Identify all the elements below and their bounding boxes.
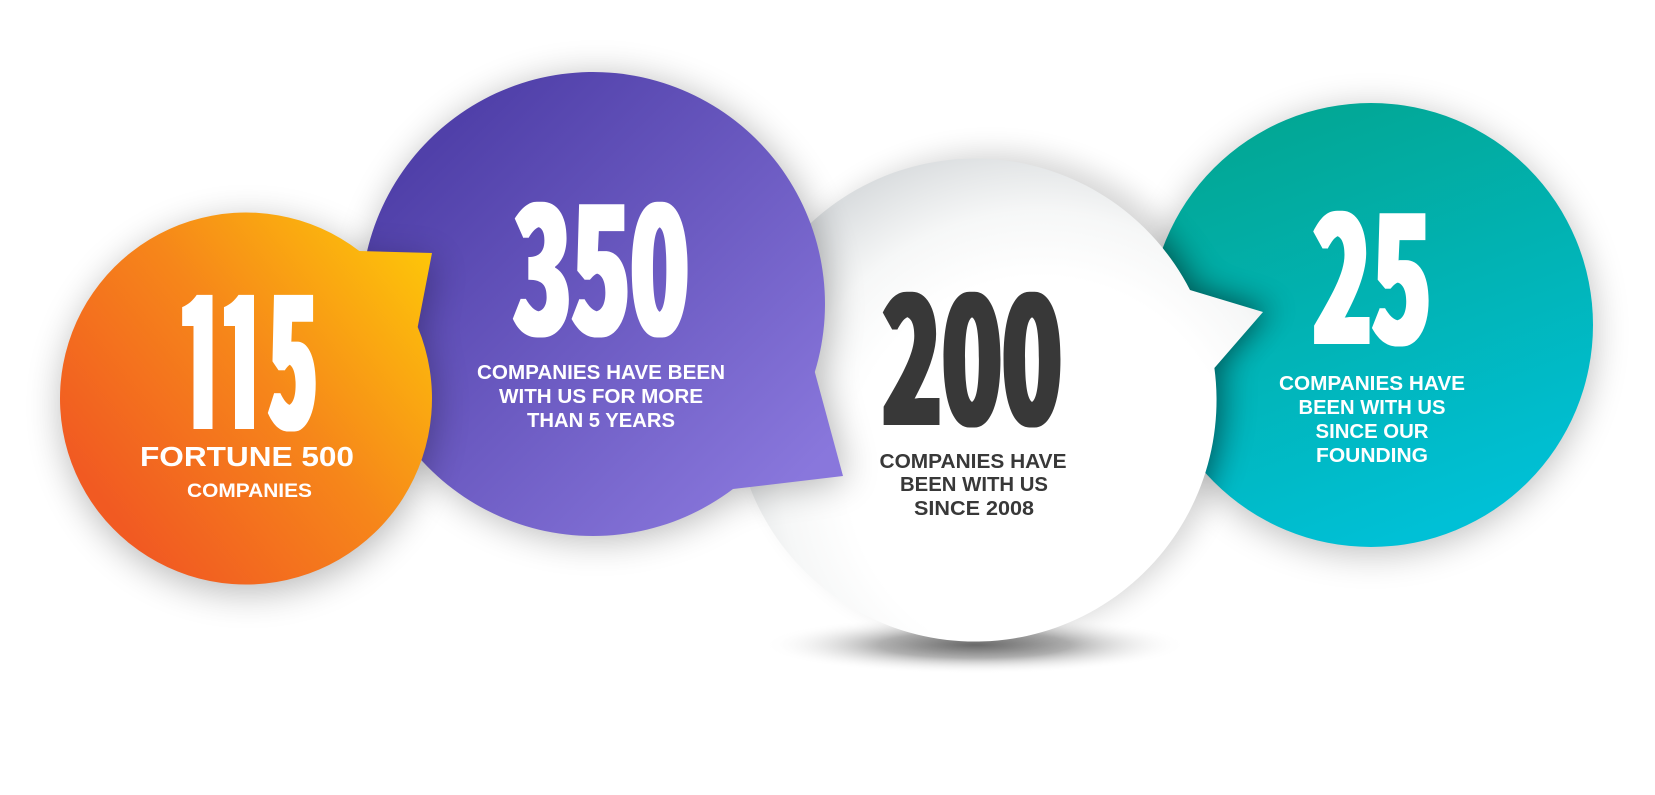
purple bubble shape	[361, 72, 843, 536]
label: companies have been with us since our founding: SINCE OUR	[1316, 421, 1429, 443]
white bubble shape	[734, 159, 1263, 642]
floor shadow under white bubble	[763, 616, 1187, 674]
number 200: 200	[882, 216, 1062, 477]
label: companies have been with us since our founding: COMPANIES HAVE	[1279, 373, 1465, 395]
panel: orange speech bubble, 115 fortune 500 companies	[60, 213, 434, 593]
panel: white speech bubble, 200 companies	[734, 153, 1279, 642]
label: fortune 500: FORTUNE 500	[140, 441, 354, 472]
teal circle	[1149, 103, 1593, 547]
panel: purple speech bubble, 350 companies	[361, 72, 847, 540]
label: companies have been with us since 2008: COMPANIES HAVE	[880, 451, 1066, 473]
label: companies have been with us since our founding: BEEN WITH US	[1298, 397, 1446, 419]
orange bubble shape	[60, 213, 432, 585]
number 25: 25	[1312, 135, 1432, 396]
label: companies have been with us for more than 5 years: THAN 5 YEARS	[527, 410, 675, 432]
label: companies have been with us for more than 5 years	[477, 362, 725, 432]
number 350: 350	[513, 126, 689, 387]
label: companies have been with us since 2008	[880, 451, 1066, 520]
panel: teal speech bubble, 25 companies	[1149, 103, 1593, 553]
number 115: 115	[177, 222, 317, 482]
label: companies have been with us for more than 5 years: WITH US FOR MORE	[499, 386, 703, 408]
label: companies have been with us since 2008: BEEN WITH US	[900, 474, 1048, 496]
label: companies have been with us since our founding: FOUNDING	[1316, 445, 1428, 467]
label: companies: COMPANIES	[187, 481, 312, 502]
label: companies have been with us since 2008: SINCE 2008	[914, 498, 1034, 520]
label: companies have been with us since our founding	[1279, 373, 1465, 467]
label: companies have been with us for more than 5 years: COMPANIES HAVE BEEN	[477, 362, 725, 384]
